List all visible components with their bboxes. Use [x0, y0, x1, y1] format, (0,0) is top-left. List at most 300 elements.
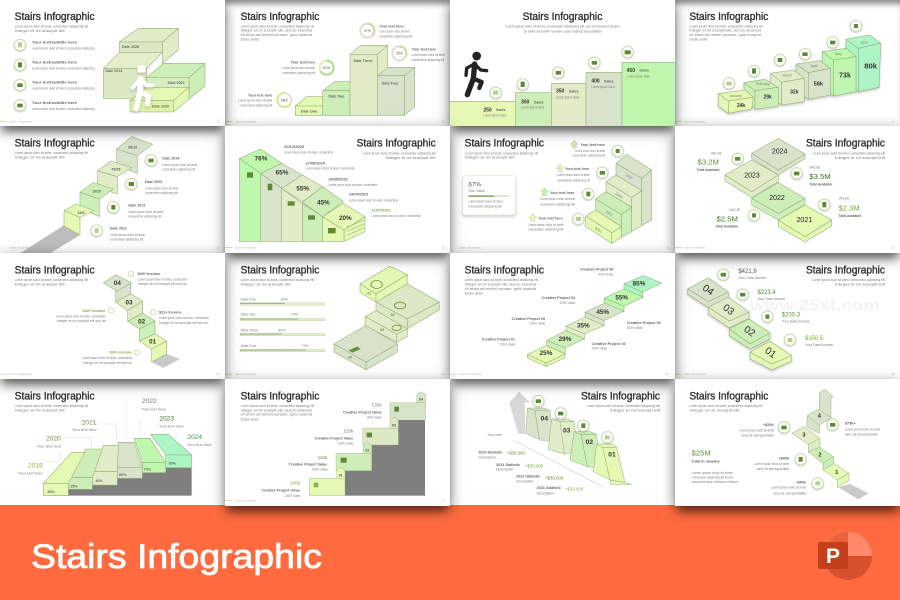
income text: Integer et mi suscipit elit sed do: [138, 282, 187, 286]
percent card: Your Value: [468, 189, 485, 193]
callout icons: [778, 419, 838, 489]
value labels: Creative Project Value: [343, 410, 382, 414]
percent card: Lorem ipsum dolor sit amet,: [468, 200, 503, 204]
icons and arrow callouts: Lorem ipsum dolor sit amet: [528, 223, 563, 227]
stairs: [103, 28, 205, 112]
value labels: 1000+ Sales: [312, 468, 328, 472]
footer: Stairs Infographic: [235, 372, 257, 376]
footer: Stairs Infographic: [235, 498, 257, 502]
intro text: Integer et mi suscipit elit: [835, 156, 885, 160]
bar values: Lorem ipsum dolor: [521, 106, 545, 110]
footer: 16: [442, 119, 445, 123]
statistic list: [478, 433, 584, 495]
callouts: Lorem ipsum dolor sit amet: [110, 233, 145, 237]
step numbers: 03: [563, 427, 571, 434]
block numbers and icons: 04: [348, 355, 352, 359]
intro text: Lorem ipsum dolor sit amet, consectetur adipiscing elit: [812, 151, 885, 155]
intro text: [15, 24, 88, 33]
callout text: Lorem ipsum dolor sit amet: [739, 429, 774, 433]
callouts: Lorem ipsum dolor sit amet: [145, 186, 178, 190]
income callouts: [108, 271, 156, 355]
year labels: [744, 149, 812, 224]
donut text: Your text here: [412, 47, 436, 51]
callout text: +$40K: [778, 456, 790, 460]
step icons: [490, 46, 633, 98]
year labels: Your text here: [159, 425, 184, 429]
box values: 58k: [814, 81, 824, 87]
title: Stairs Infographic: [15, 138, 95, 150]
icons and arrow callouts: Your text here: [538, 216, 563, 220]
intro text: Lorem ipsum dolor sit amet, consectetur adipiscing elit: [15, 24, 88, 28]
step labels: 08/16: [128, 146, 137, 150]
intro text: [15, 277, 88, 286]
value labels: 135k: [372, 403, 382, 408]
bar values: 450: [627, 68, 635, 74]
step numbers: 04: [114, 280, 121, 287]
bar values: 400: [591, 78, 600, 84]
income values: $421.9: [738, 269, 757, 275]
donut charts: 58%: [281, 98, 288, 102]
donut text: [238, 24, 445, 108]
tag numbers: [339, 398, 423, 478]
callouts: Date 2023: [145, 180, 162, 184]
statistic list: +$30,000: [507, 451, 525, 456]
icon: gray up arrow: [509, 392, 530, 434]
panel: slide 14 stepped value blocks: [225, 379, 450, 506]
title: Stairs Infographic: [15, 264, 95, 276]
footer: Stairs Infographic: [684, 119, 706, 123]
value callouts: VALUE: [711, 151, 723, 155]
tag numbers: 01: [339, 474, 343, 478]
icons and arrow callouts: consectetur adipiscing elit: [528, 228, 563, 232]
income text: Integer et mi suscipit elit sed do: [83, 361, 132, 365]
callouts: [91, 155, 197, 242]
project labels: Creative Project 03: [512, 316, 545, 320]
statistic list: Description: [496, 468, 514, 472]
intro text: Integer et mi suscipit elit: [15, 29, 65, 33]
project labels: 2020+ deals: [598, 272, 614, 276]
income values: $200.3: [782, 312, 801, 318]
total value: eiusmod tempor incididunt ut labore: [692, 480, 738, 484]
value callouts: [697, 151, 861, 229]
title: Stairs Infographic: [806, 138, 886, 150]
intro text: Lorem ipsum dolor sit amet, consectetur adipiscing elit: [241, 404, 314, 408]
panel: slide 12 tilted number plates: [675, 252, 900, 379]
intro text: Ut enim ad minim veniam, quis nostrud: [465, 286, 536, 290]
icons and arrow callouts: consectetur adipiscing elit: [572, 154, 605, 158]
value callouts: VALUE: [809, 166, 821, 170]
total value: Lorem ipsum dolor sit amet,: [692, 471, 733, 475]
callouts: consectetur adipiscing elit: [162, 168, 195, 172]
percent labels: 45%: [596, 308, 609, 315]
percent labels: [540, 280, 646, 357]
project labels: Creative Project 02: [592, 342, 626, 346]
intro text: Lorem ipsum dolor sit amet, consectetur adipiscing elit: [587, 404, 660, 408]
callout text: sed ut perspiciatis: [741, 434, 774, 438]
value labels: Creative Project Value: [289, 462, 327, 466]
percent labels: 25%: [540, 350, 553, 357]
step percents: 40%: [95, 479, 103, 483]
project labels: Creative Project 01: [482, 337, 515, 341]
project labels: Creative Project 05: [627, 321, 661, 325]
icon: PowerPoint logo: P: [826, 545, 840, 568]
intro text: Lorem ipsum dolor sit amet, consectetur adipiscing elit: [812, 278, 885, 282]
box values: [729, 40, 878, 109]
callouts: Date 2021: [110, 227, 127, 231]
bar values: 250: [483, 107, 492, 113]
income text: [56, 271, 210, 365]
intro text: [812, 151, 885, 160]
step labels: [77, 146, 137, 215]
year labels: 2021: [797, 217, 812, 224]
intro text: Integer et mi suscipit elit: [241, 282, 291, 286]
footer: [0, 119, 220, 123]
statistic list: 2022 Statistic: [516, 475, 540, 479]
statistic list: 2024 Statistic: [478, 451, 502, 455]
intro text: Ut enim ad minim veniam, quis nostrud exercitation: [524, 29, 602, 33]
intro text: [241, 277, 314, 286]
intro text: Ut enim ad minim veniam, quis nostrud: [241, 33, 312, 37]
year labels: 2022: [769, 195, 785, 202]
income text: $40+ Income: [83, 308, 105, 312]
intro text: Integer et mi suscipit elit: [15, 156, 65, 160]
watermark: www.25xt.com: [749, 297, 880, 314]
intro text: Ut enim ad minim veniam, quis nostrud: [241, 413, 312, 417]
year labels: 2024: [772, 149, 788, 156]
progress bars: Data Four: [241, 344, 257, 348]
block labels: Date Three: [354, 59, 373, 63]
intro text: Integer et mi suscipit elit: [15, 282, 65, 286]
panel: slide 15 descending folded steps: [450, 379, 675, 506]
icon list: Your text/subtitle here: [32, 61, 77, 65]
percent labels: 45%: [317, 199, 330, 206]
bar values: Lorem ipsum dolor: [556, 95, 580, 99]
box values: 24k: [737, 103, 745, 109]
icons and arrow callouts: Lorem ipsum dolor sit amet: [575, 149, 605, 153]
icon list: Lorem ipsum dolor sit amet, consectetur adipiscing: [32, 67, 95, 71]
bar values: [483, 68, 651, 118]
value callouts: Total Available: [809, 182, 832, 186]
panel: slide 13 perspective stairs over gray base: [0, 379, 225, 506]
date notes: [284, 145, 422, 218]
footer: Stairs Infographic: [459, 372, 483, 376]
plate icons: [732, 153, 830, 221]
footer: 20: [442, 245, 445, 249]
donut text: consectetur adipiscing elit: [282, 71, 315, 75]
income text: Integer et mi suscipit elit sed do: [159, 320, 208, 324]
year labels: 2024: [625, 173, 633, 180]
income values: Your Data Income: [805, 342, 833, 346]
callout text: Lorem ipsum dolor sit amet: [845, 427, 880, 431]
year labels: 2023: [159, 415, 174, 422]
box values: January: [729, 94, 742, 98]
box values: 80k: [864, 61, 878, 70]
step labels: 19/20: [92, 189, 101, 193]
project labels: 2020+ deals: [500, 342, 515, 346]
callout text: sed ut perspiciatis: [773, 491, 806, 495]
footer: [459, 245, 670, 249]
intro text: [689, 24, 763, 42]
bar values: Sales: [639, 69, 649, 73]
date notes: 24/04/2022: [349, 192, 368, 196]
icons and arrow callouts: Your text here: [550, 191, 574, 195]
bar values: Lorem ipsum dolor: [591, 85, 615, 89]
year labels: 2023: [744, 172, 760, 179]
donut text: Your text here: [291, 60, 315, 64]
footer: 26: [892, 372, 895, 376]
step numbers: 01: [608, 452, 616, 459]
donut text: consectetur adipiscing elit: [240, 104, 272, 108]
percent labels: 20%: [339, 215, 352, 222]
project labels: [482, 267, 661, 350]
column icons: [247, 172, 336, 233]
percent labels: 85%: [633, 280, 646, 287]
icons and arrow callouts: consectetur adipiscing elit: [540, 202, 575, 206]
statistic list: +$30,000: [565, 486, 584, 491]
percent labels: 35%: [577, 322, 590, 329]
bar values: 350: [556, 89, 565, 95]
intro text: Lorem ipsum dolor sit amet, consectetur adipiscing elit: [465, 151, 538, 155]
icon list: Your text/subtitle here: [32, 81, 77, 85]
progress bars: Data One: [241, 297, 256, 301]
year labels: Your text here: [141, 407, 166, 411]
value callouts: Total Available: [838, 214, 861, 218]
icon list: Your text/subtitle here: [32, 101, 77, 105]
icon list: Lorem ipsum dolor sit amet, consectetur adipiscing: [32, 47, 95, 51]
intro text: Integer et mi suscipit elit: [15, 409, 65, 413]
stair labels: Date 2021: [168, 81, 185, 85]
intro text: Integer et mi suscipit elit, sed do eiusmod: [465, 282, 536, 286]
block numbers and icons: 01: [367, 291, 371, 295]
step numbers: 02: [586, 439, 593, 446]
folded steps: [526, 408, 632, 484]
callouts: Lorem ipsum dolor sit amet: [162, 163, 197, 167]
panel: slide 9 numbered zigzag: [0, 252, 225, 379]
value callouts: Total Available: [715, 225, 738, 229]
footer: 22: [892, 245, 895, 249]
total value: [692, 449, 738, 484]
icons and arrow callouts: consectetur adipiscing elit: [557, 178, 590, 182]
intro text: Lorem ipsum dolor sit amet, consectetur adipiscing elit: [15, 404, 88, 408]
year labels: 2022: [605, 210, 613, 217]
year labels: [594, 173, 633, 234]
floor shadow: [838, 484, 868, 499]
intro text: Lorem ipsum dolor sit amet, consectetur adipiscing elit: [241, 24, 314, 28]
statistic list: 2021 Statistic: [537, 486, 561, 490]
callouts: consectetur adipiscing elit: [128, 215, 162, 219]
intro text: Ut enim ad minim veniam, quis nostrud: [689, 33, 761, 37]
block numbers and icons: [348, 280, 406, 359]
income text: $40+ Income: [138, 271, 160, 275]
step percents: 20%: [47, 490, 55, 494]
box values: February: [756, 82, 770, 86]
title: Stairs Infographic: [465, 264, 545, 276]
perspective steps: [43, 434, 192, 496]
footer: 21: [666, 245, 670, 249]
callout text: [739, 422, 880, 495]
percent labels: 55%: [296, 186, 309, 193]
intro text: Integer et mi suscipit elit: [465, 156, 515, 160]
project labels: Creative Project 06: [580, 267, 613, 271]
year labels: [18, 398, 212, 475]
value callouts: $3.2M: [698, 157, 719, 166]
title: Stairs Infographic: [241, 390, 320, 402]
panel: slide 7 side stairs with card: [450, 126, 675, 252]
stair labels: Date 2026: [122, 45, 139, 49]
icons and arrow callouts: Lorem ipsum dolor sit amet: [557, 173, 590, 177]
income text: Lorem ipsum dolor sit amet, consectetur: [56, 314, 107, 318]
step numbers: 02: [138, 318, 146, 325]
date notes: Lorem ipsum dolor sit amet, consectetur: [328, 183, 378, 187]
progress bars: 72%: [302, 344, 309, 348]
statistic list: +$30,000: [545, 475, 564, 480]
icon: white walking figure: [133, 65, 153, 109]
intro text: Integer et mi suscipit elit: [835, 282, 885, 286]
footer: Stairs Infographic: [9, 119, 33, 123]
title: Stairs Infographic: [241, 264, 320, 276]
donut text: Your text here: [379, 24, 404, 28]
icon list: Lorem ipsum dolor sit amet, consectetur adipiscing: [32, 87, 95, 91]
zigzag stairs: [103, 274, 167, 362]
bar values: Sales: [569, 90, 579, 94]
bar values: Sales: [496, 108, 506, 112]
date notes: 27/08/2024: [306, 162, 326, 166]
tag numbers: 03: [392, 423, 396, 427]
icon list: Lorem ipsum dolor sit amet, consectetur adipiscing: [32, 107, 95, 111]
bar values: Lorem ipsum dolor: [627, 75, 651, 79]
intro text: Lorem ipsum dolor sit amet, consectetur adipiscing elit: [15, 277, 88, 281]
year labels: 2024: [187, 434, 202, 441]
footer: Stairs Infographic: [9, 245, 32, 249]
callouts: Date 2022: [128, 204, 145, 208]
step numbers: [114, 280, 157, 345]
year labels: 2021: [82, 419, 97, 426]
title: Stairs Infographic: [465, 138, 545, 150]
intro text: Integer et mi suscipit elit: [689, 409, 739, 413]
progress bars: Data Two: [241, 312, 255, 316]
year labels: 2020: [46, 435, 61, 442]
year labels: Your text here: [72, 428, 97, 432]
box values: June: [860, 40, 868, 44]
value labels: 115k: [318, 455, 328, 460]
donut text: Lorem ipsum dolor sit amet: [238, 99, 272, 103]
intro text: Lorem ipsum dolor sit amet, consectetur adipiscing elit: [241, 277, 314, 281]
callout text: sed ut perspiciatis: [757, 467, 790, 471]
statistic list: Description: [516, 479, 534, 483]
box values: 32k: [790, 89, 799, 95]
banner title: Stairs Infographic: [31, 538, 322, 576]
footer: 25: [665, 372, 668, 376]
project labels: 2020+ deals: [560, 301, 575, 305]
title: Stairs Infographic: [806, 264, 886, 276]
value callouts: $3.5M: [809, 172, 831, 181]
value labels: 105k: [290, 481, 301, 486]
step labels: 24/5: [77, 211, 85, 215]
donut charts: 62%: [323, 66, 330, 70]
stair blocks: [295, 45, 415, 115]
value labels: Creative Project Value: [315, 436, 353, 440]
total value: $25M: [692, 449, 711, 458]
block numbers and icons: 03: [380, 328, 384, 332]
panel: slide 1 staircase with walking figure: [0, 0, 225, 126]
bar values: 300: [521, 99, 530, 105]
stair labels: Date 2020: [152, 104, 169, 108]
year labels: 2021: [594, 226, 603, 234]
icons and arrow callouts: Lorem ipsum dolor sit amet: [540, 197, 575, 201]
box icons: [723, 20, 862, 89]
callout text: +$20K: [763, 423, 774, 427]
percent labels: [255, 155, 352, 222]
percent labels: 76%: [255, 155, 268, 162]
floor shadow: [152, 353, 180, 367]
value labels: 1000+ Sales: [366, 416, 382, 420]
income values: Your Data Income: [738, 276, 766, 280]
plate numbers: 02: [741, 324, 757, 339]
donut charts: 35%: [396, 52, 403, 56]
project labels: 2020+ deals: [627, 325, 642, 329]
bar values: Lorem ipsum dolor: [483, 114, 507, 118]
callouts: Lorem ipsum dolor sit amet: [128, 210, 163, 214]
intro text: Lorem ipsum dolor sit amet, consectetur adipiscing elit, sed do eiusmod tempor: [505, 25, 621, 29]
icons and arrow callouts: Your text here: [581, 143, 605, 147]
footer: Stairs Infographic: [9, 372, 33, 376]
year labels: 2023: [615, 192, 623, 199]
block labels: [301, 59, 399, 113]
stairs: [586, 154, 652, 243]
percent card: 67%: [468, 181, 481, 188]
title: Stairs Infographic: [581, 390, 661, 402]
percent card: consectetur adipiscing elit: [468, 204, 502, 208]
percent stairs: [527, 275, 662, 366]
block labels: Date One: [301, 109, 317, 113]
intro text: Integer et mi suscipit elit, sed do eiusmod: [689, 29, 761, 33]
intro text: [362, 151, 436, 160]
income values: $223.4: [757, 290, 776, 296]
title: Stairs Infographic: [241, 11, 320, 23]
monthly boxes: [718, 35, 881, 113]
footer: Stairs Infographic: [684, 372, 706, 376]
panel: slide 8 year plates: [675, 126, 900, 252]
income text: Integer et mi suscipit elit sed do: [57, 319, 106, 323]
intro text: Duis aute: [241, 38, 259, 42]
step numbers: [802, 413, 838, 476]
value blocks: [309, 392, 426, 496]
step numbers: 3: [802, 433, 806, 439]
bar values: Sales: [534, 100, 544, 104]
plate numbers: [700, 282, 778, 361]
donut text: consectetur adipiscing elit: [379, 34, 412, 38]
intro text: Duis aute: [465, 291, 483, 295]
step numbers: 2: [818, 453, 822, 459]
donut charts: [277, 24, 406, 107]
footer: Stairs Infographic: [459, 245, 482, 249]
footer: [675, 372, 895, 376]
project labels: Creative Project 04: [542, 296, 576, 300]
callout text: -$40K: [796, 480, 806, 484]
statistic list: 2023 Statistic: [496, 463, 520, 467]
intro text: Integer et mi suscipit elit: [610, 409, 660, 413]
donut text: Lorem ipsum dolor sit amet: [282, 66, 315, 70]
callout text: sed ut perspiciatis: [845, 432, 878, 436]
footer: 24: [442, 372, 445, 376]
callout text: Lorem ipsum dolor sit amet: [754, 462, 789, 466]
percent labels: 29%: [559, 336, 572, 343]
income values: $150.5: [805, 335, 824, 341]
progress bars: Data Three: [241, 328, 258, 332]
intro text: [15, 404, 88, 413]
callouts: consectetur adipiscing elit: [110, 238, 143, 242]
intro text: Integer et mi suscipit elit: [386, 156, 436, 160]
